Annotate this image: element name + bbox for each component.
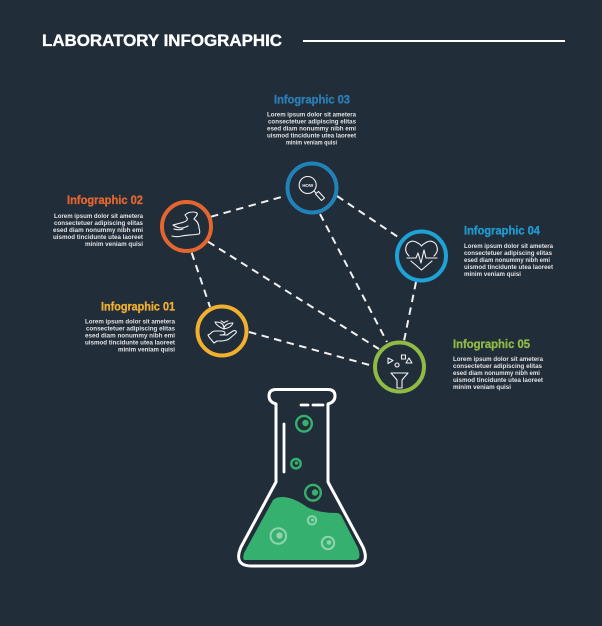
dashed connector lines: [192, 196, 416, 366]
text block: infographic 01: minim veniam quisi: [118, 346, 175, 353]
text block: infographic 05: uismod tincidunte utea laoreet: [453, 377, 544, 384]
text block: infographic 05: consectetuer adipiscing elitas: [453, 363, 542, 370]
text block: infographic 01: consectetuer adipiscing elitas: [86, 325, 175, 332]
text block: infographic 03: Lorem ipsum dolor sit ametera: [267, 112, 356, 118]
bubbles inside liquid: [270, 516, 334, 549]
node 01: hand with plant icon in yellow ring: [198, 306, 246, 356]
node 03: magnifier icon in blue ring: HOW: [302, 183, 314, 188]
node 04: heartbeat icon in cyan ring: [397, 232, 446, 280]
text block: infographic 03: consectetuer adipiscing elitas: [268, 118, 356, 126]
text block: infographic 04: consectetuer adipiscing elitas: [464, 250, 552, 257]
text block: infographic 02: minim veniam quisi: [85, 241, 143, 248]
text block: infographic 05: esed diam nonummy nibh emi: [453, 370, 540, 377]
text block: infographic 04: minim veniam quisi: [464, 271, 521, 278]
flask liquid: [243, 497, 359, 560]
title: LABORATORY INFOGRAPHIC: [42, 31, 282, 50]
text block: infographic 03: [267, 94, 357, 146]
text block: infographic 03: minim veniam quisi: [286, 140, 337, 146]
text block: infographic 01: Lorem ipsum dolor sit ametera: [85, 318, 175, 325]
text block: infographic 05: Infographic 05: [453, 339, 531, 351]
text block: infographic 01: Infographic 01: [101, 302, 176, 314]
node 03: magnifier icon in blue ring: [288, 164, 336, 212]
text block: infographic 04: esed diam nonummy nibh emi: [464, 257, 550, 264]
text block: infographic 02: [53, 195, 144, 248]
node 02: muscle arm icon in orange ring: [162, 202, 211, 251]
text block: infographic 02: consectetuer adipiscing elitas: [54, 220, 143, 227]
text block: infographic 03: esed diam nonummy nibh emi: [267, 126, 356, 132]
text block: infographic 03: Infographic 03: [274, 94, 350, 106]
text block: infographic 05: minim veniam quisi: [453, 384, 511, 391]
text block: infographic 03: uismod tincidunte utea laoreet: [267, 132, 357, 140]
text block: infographic 02: esed diam nonummy nibh emi: [53, 227, 143, 234]
text block: infographic 04: uismod tincidunte utea laoreet: [464, 264, 554, 271]
text block: infographic 04: [464, 226, 554, 278]
text block: infographic 04: Lorem ipsum dolor sit ametera: [464, 243, 553, 250]
text block: infographic 01: [85, 302, 176, 353]
flask outline: [239, 390, 365, 566]
text block: infographic 01: esed diam nonummy nibh emi: [85, 332, 175, 339]
flask highlights: [284, 405, 323, 472]
text block: infographic 02: Infographic 02: [67, 195, 143, 207]
bubbles above liquid: [291, 416, 321, 501]
text block: infographic 02: uismod tincidunte utea laoreet: [53, 234, 144, 241]
text block: infographic 02: Lorem ipsum dolor sit ametera: [54, 213, 143, 220]
node 05: funnel with shapes icon in green ring: [375, 342, 424, 392]
icon: laboratory flask: [239, 390, 365, 566]
text block: infographic 05: [453, 339, 544, 391]
text block: infographic 05: Lorem ipsum dolor sit ametera: [453, 356, 543, 363]
text block: infographic 04: Infographic 04: [464, 226, 541, 238]
text block: infographic 01: uismod tincidunte utea laoreet: [85, 339, 176, 346]
